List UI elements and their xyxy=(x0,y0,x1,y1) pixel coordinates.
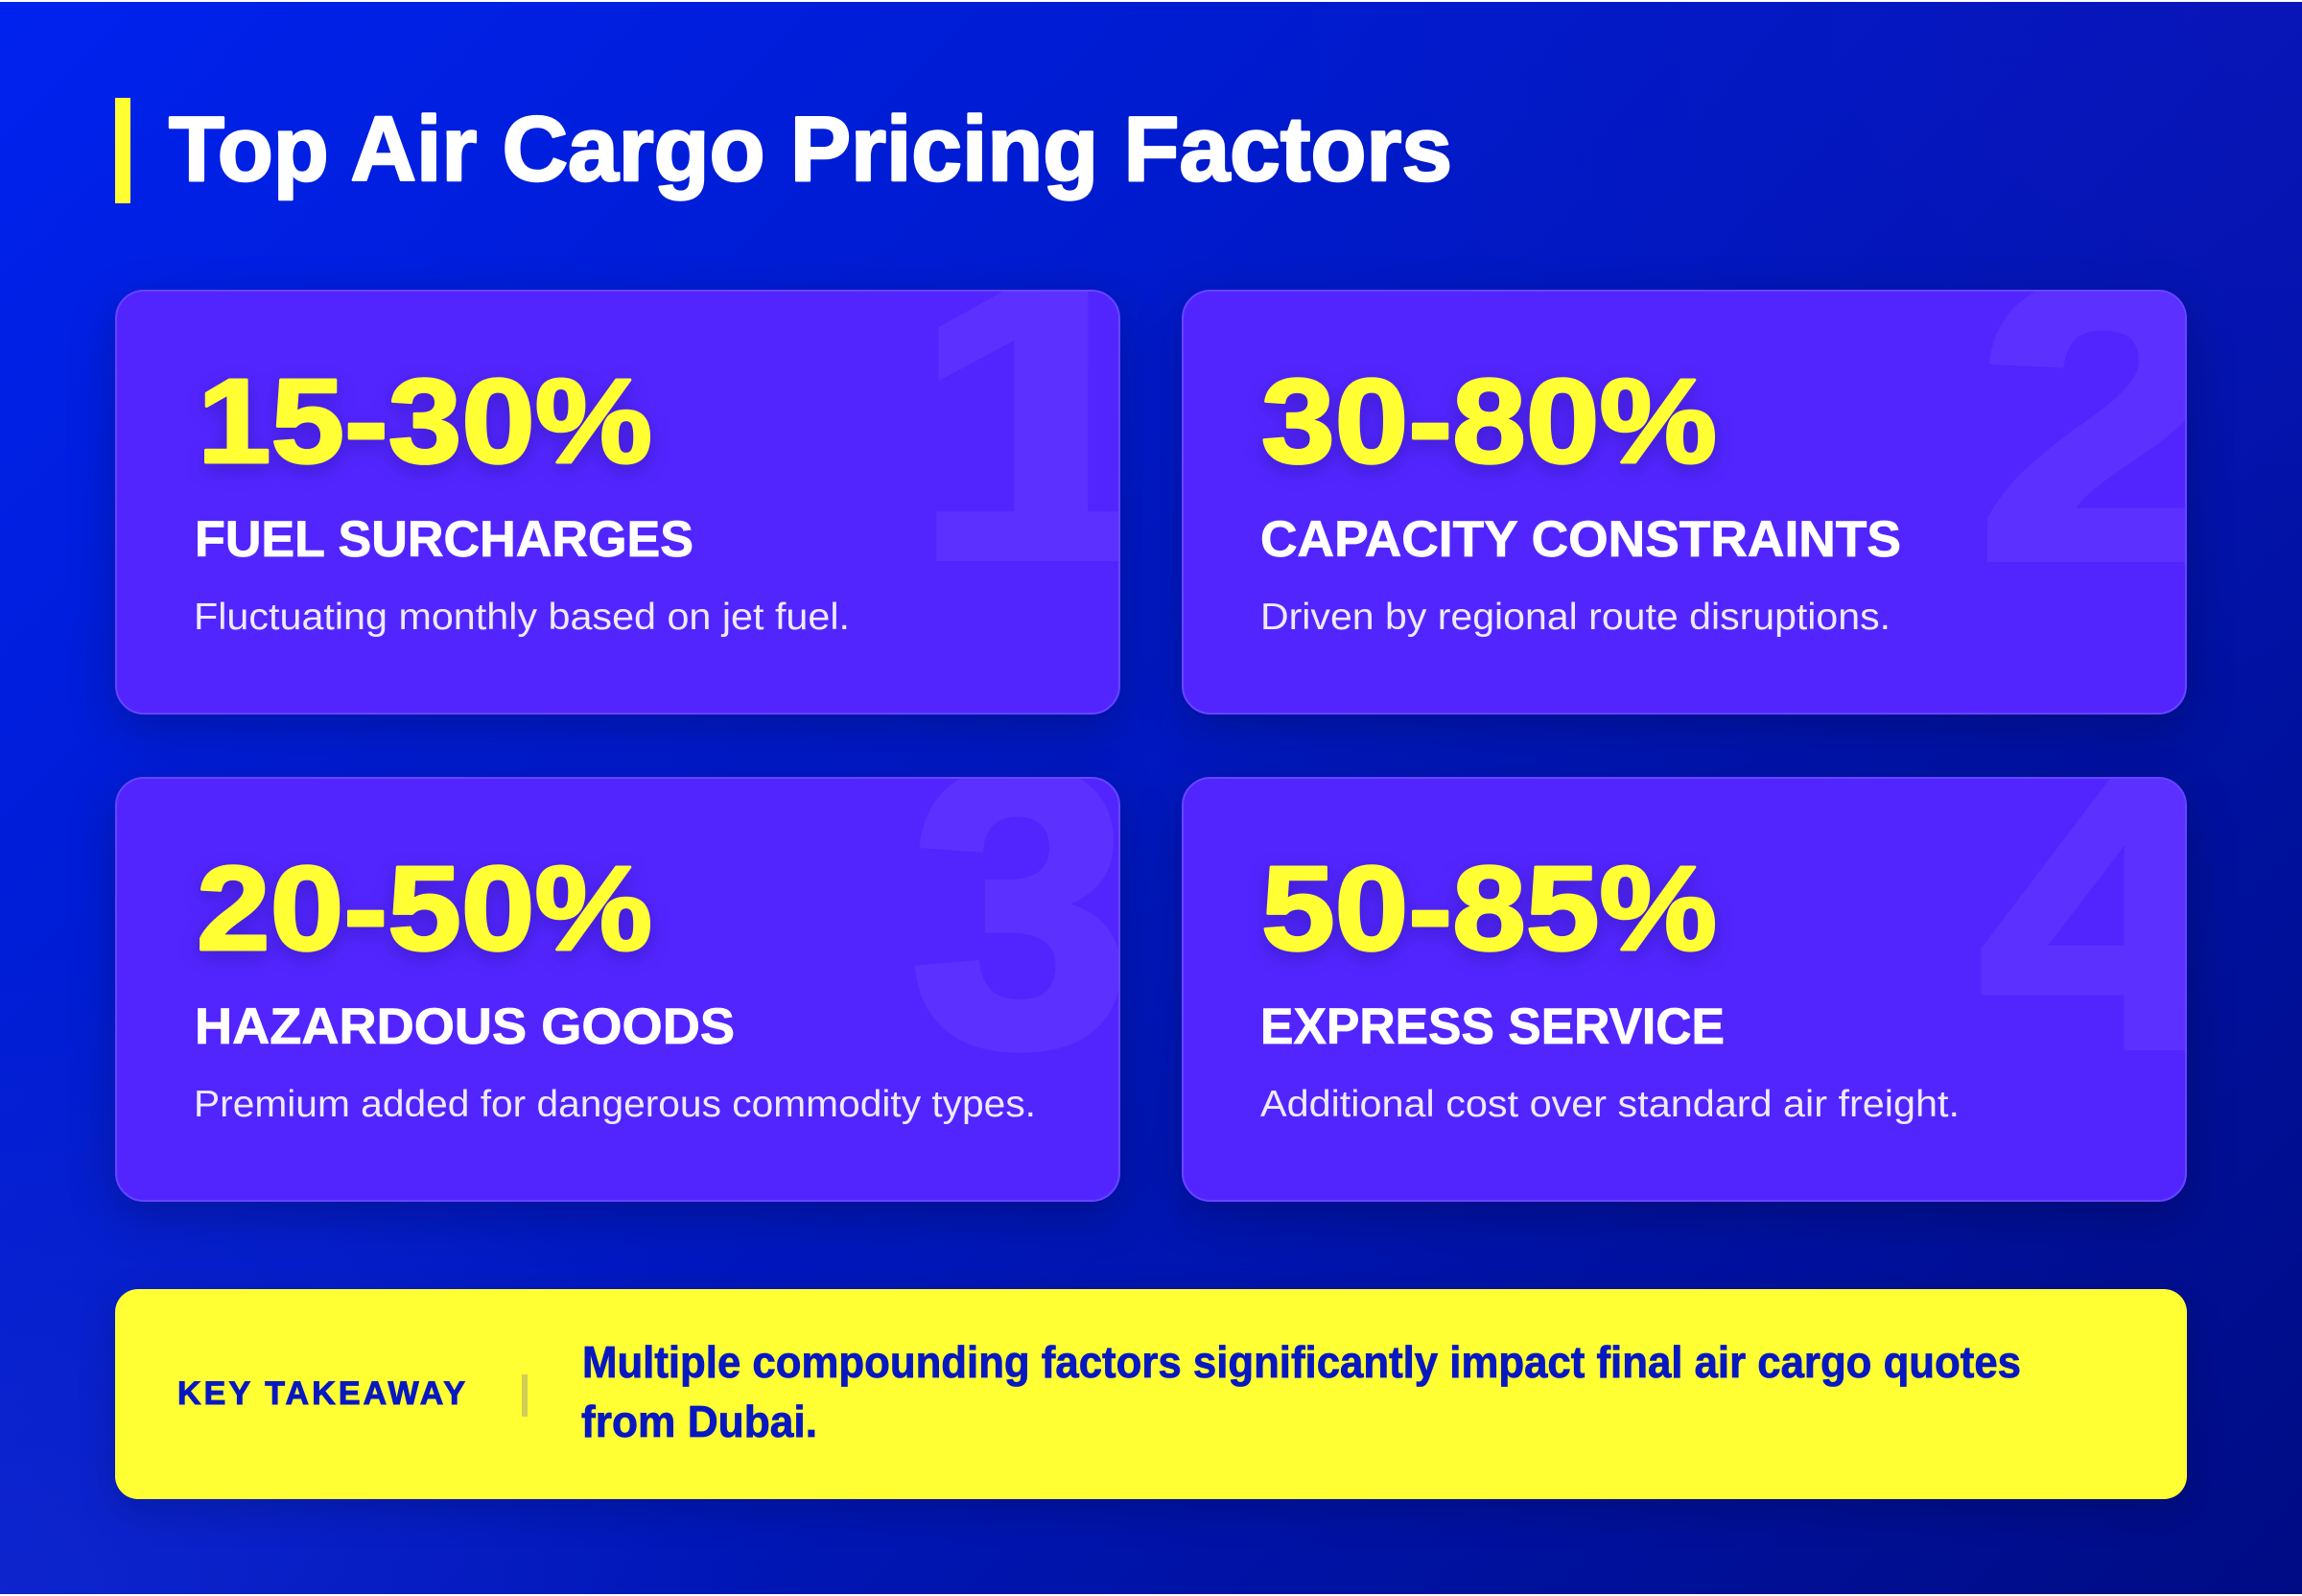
stat: 15-30%: 15-30% xyxy=(198,355,652,488)
key takeaway label: KEY TAKEAWAY xyxy=(177,1375,465,1412)
stat: 50-85%: 50-85% xyxy=(1261,842,1717,975)
callout: key takeaway xyxy=(115,1289,2187,1499)
panel: fuel surcharges xyxy=(115,290,1120,715)
label: fuel surcharges: FUEL SURCHARGES xyxy=(195,511,693,568)
panel: hazardous goods xyxy=(115,777,1120,1202)
takeaway text: from Dubai. xyxy=(581,1396,817,1446)
title: Top Air Cargo Pricing Factors xyxy=(169,98,1452,200)
description: Fluctuating monthly based on jet fuel. xyxy=(194,597,850,638)
stat: 20-50%: 20-50% xyxy=(197,842,652,975)
stat: 30-80%: 30-80% xyxy=(1261,355,1717,488)
panel: capacity constraints xyxy=(1182,290,2187,715)
label: express service: EXPRESS SERVICE xyxy=(1260,998,1725,1055)
description: Additional cost over standard air freight. xyxy=(1260,1084,1960,1125)
panel: express service xyxy=(1182,777,2187,1202)
description: Premium added for dangerous commodity types. xyxy=(194,1084,1036,1125)
takeaway text xyxy=(581,1337,2021,1446)
heading accent bar xyxy=(115,98,130,203)
label: hazardous goods: HAZARDOUS GOODS xyxy=(195,998,735,1055)
takeaway text: Multiple compounding factors significantly impact final air cargo quotes xyxy=(582,1337,2021,1387)
divider xyxy=(522,1374,528,1417)
description: Driven by regional route disruptions. xyxy=(1260,597,1891,638)
label: capacity constraints: CAPACITY CONSTRAINTS xyxy=(1260,511,1901,568)
